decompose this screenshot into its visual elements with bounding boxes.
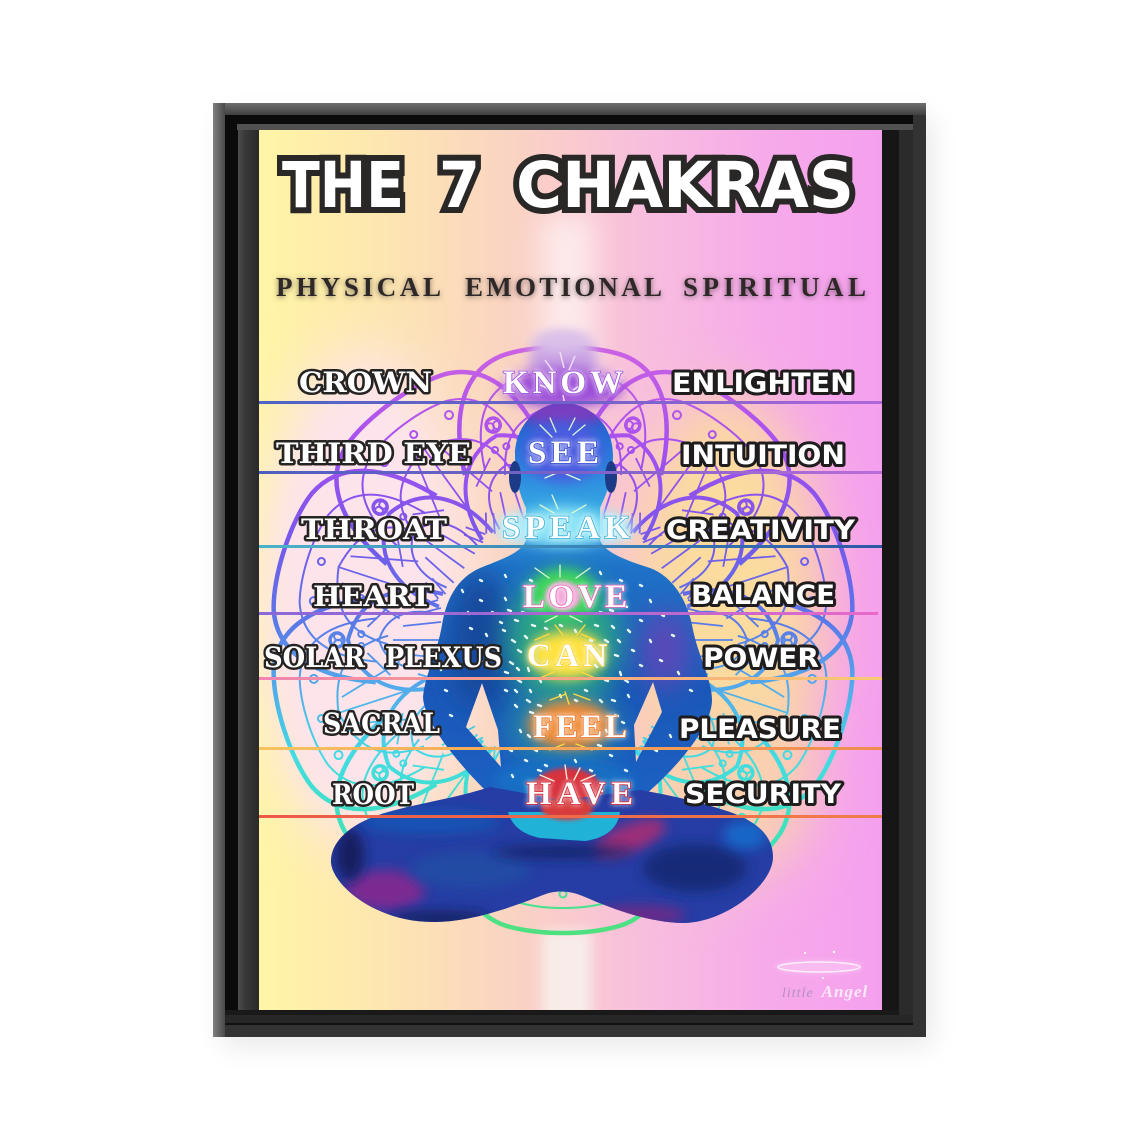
little angel logo — [777, 951, 868, 1001]
left column: chakra names: SOLAR — [264, 641, 366, 674]
centre column: chakra verbs: SPEAK — [502, 510, 630, 546]
centre column: chakra verbs: FEEL — [533, 709, 627, 745]
chakra feather petals — [535, 418, 590, 622]
crown hair burst — [503, 332, 623, 408]
right column: chakra qualities: INTUITION — [681, 440, 845, 471]
title: THE — [282, 149, 404, 222]
crossed legs — [330, 787, 773, 923]
white sparkles — [440, 572, 692, 791]
left column: chakra names: THROAT — [301, 513, 447, 546]
subtitle: PHYSICAL — [276, 272, 441, 302]
right column: chakra qualities: BALANCE — [691, 580, 835, 611]
subtitle: SPIRITUAL — [683, 272, 866, 302]
left column: chakra names: HEART — [313, 580, 432, 613]
right column: chakra qualities: SECURITY — [685, 779, 841, 810]
title: CHAKRAS — [516, 149, 854, 222]
logo text: little Angel — [782, 982, 868, 1001]
poster canvas background — [259, 130, 882, 1020]
right column: chakra qualities: ENLIGHTEN — [672, 368, 854, 399]
frame shadow — [222, 116, 932, 1046]
centre column: chakra verbs: CAN — [527, 638, 607, 674]
right column: chakra qualities: PLEASURE — [679, 714, 841, 745]
centre column: chakra verbs — [502, 365, 633, 812]
centre column: chakra verbs: HAVE — [526, 776, 633, 812]
subtitle — [276, 272, 866, 302]
right column: chakra qualities — [666, 368, 855, 810]
centre column: chakra verbs: LOVE — [523, 579, 627, 615]
title: 7 — [439, 149, 480, 222]
subtitle: EMOTIONAL — [465, 272, 662, 302]
centre column: chakra verbs: SEE — [528, 435, 599, 471]
root chakra lower petals — [541, 796, 593, 820]
throat glow halo — [495, 508, 635, 548]
meditating figure — [325, 332, 780, 930]
left column: chakra names: SACRAL — [323, 707, 440, 740]
left column: chakra names: PLEXUS — [385, 641, 502, 674]
left column: chakra names: CROWN — [299, 366, 432, 399]
mandala behind the figure — [271, 346, 855, 936]
title — [282, 149, 854, 222]
cyan belly — [508, 812, 620, 841]
right column: chakra qualities: POWER — [703, 643, 819, 674]
chakra colour column — [450, 398, 691, 816]
left column: chakra names — [264, 366, 502, 811]
left column: chakra names: ROOT — [332, 778, 414, 811]
right column: chakra qualities: CREATIVITY — [666, 515, 855, 546]
torso, head and arms — [423, 403, 712, 815]
centre column: chakra verbs: KNOW — [503, 365, 623, 401]
ears — [509, 461, 617, 493]
chakra colour lines — [259, 401, 882, 818]
left column: chakra names: THIRD EYE — [276, 437, 471, 470]
black picture frame — [213, 103, 926, 1037]
halo icon — [777, 951, 861, 979]
